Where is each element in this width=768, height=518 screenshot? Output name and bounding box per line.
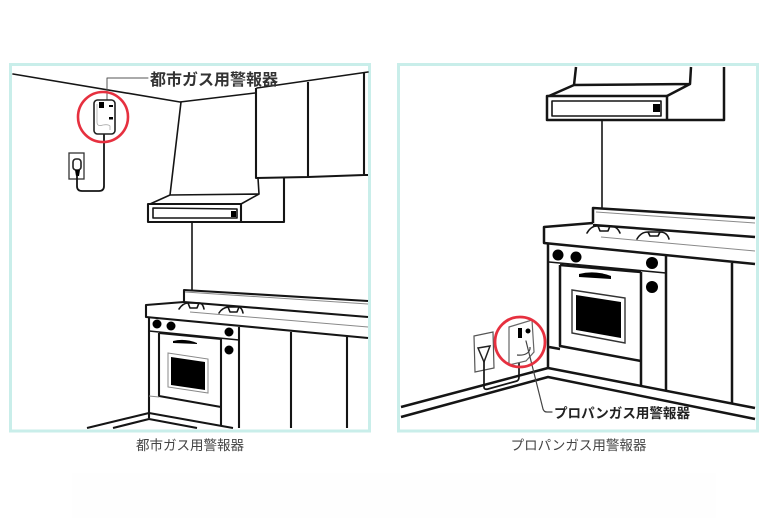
red highlight circle: [495, 317, 545, 367]
panel frame: [10, 64, 370, 431]
control knobs: [152, 320, 234, 354]
range hood: [547, 67, 724, 120]
burners: [587, 226, 669, 239]
countertop: [544, 223, 755, 264]
oven: [549, 265, 641, 361]
outlet and plug: [69, 153, 84, 179]
alarm device: [94, 100, 115, 134]
countertop: [146, 302, 368, 338]
floor lines: [87, 413, 233, 428]
base cabinets: [548, 243, 732, 403]
backsplash: [593, 208, 755, 237]
control knobs: [552, 250, 658, 293]
power cord: [77, 134, 104, 191]
ceiling lines: [13, 72, 368, 102]
backsplash: [184, 290, 368, 317]
panel: city gas kitchen: [10, 64, 370, 431]
panel frame: [398, 64, 758, 431]
caption: propane gas: プロパンガス用警報器: [511, 438, 647, 453]
bottom faint band: [72, 473, 716, 518]
alarm device: [509, 320, 534, 365]
range hood: [148, 102, 284, 222]
wall cabinets: [256, 73, 368, 178]
alarm label: 都市ガス用警報器: [150, 70, 278, 89]
vertical pipe: [601, 120, 603, 208]
burners: [179, 303, 243, 313]
red highlight circle: [78, 92, 128, 142]
power cord: [484, 362, 519, 389]
vertical pipe: [191, 223, 193, 290]
panel: propane kitchen: [398, 64, 758, 431]
oven: [159, 333, 221, 426]
outlet and plug: [474, 332, 494, 372]
floor lines: [401, 368, 755, 419]
base cabinets: [149, 318, 347, 428]
leader line: [526, 341, 552, 412]
caption: city gas: 都市ガス用警報器: [136, 438, 244, 453]
leader line: [107, 78, 148, 100]
alarm label: プロパンガス用警報器: [554, 405, 690, 421]
